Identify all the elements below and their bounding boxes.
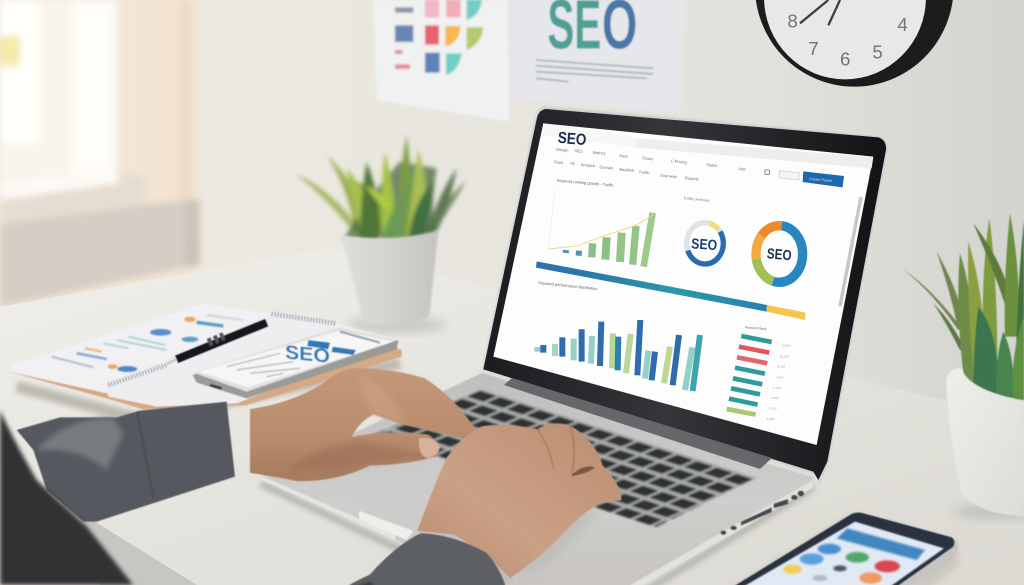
lower chart heading: Keyword performance distribution — [538, 280, 598, 291]
large SEO donut: SEO — [766, 246, 792, 264]
grouped bar chart — [537, 320, 700, 391]
navigation text: C Pricing — [671, 158, 687, 165]
hinge strip — [504, 378, 772, 469]
poster: colour blocks — [373, 0, 509, 122]
shirt sleeve left — [0, 402, 235, 585]
phone screen — [743, 522, 944, 585]
wall clock — [755, 0, 954, 87]
navigation text: Traffic — [639, 169, 650, 175]
clock numerals — [787, 11, 908, 70]
navigation text: Data — [619, 153, 629, 159]
progress band — [536, 261, 806, 320]
smartphone bottom right — [727, 513, 959, 585]
notebook cover — [8, 327, 402, 409]
ranking values — [767, 344, 791, 421]
ranking list heading: Keyword Rank — [745, 325, 767, 331]
laptop lid — [482, 106, 889, 486]
growth bar chart — [548, 188, 653, 267]
clock numerals: 4 — [897, 14, 908, 35]
laptop — [260, 106, 889, 585]
ranking values: 7,540 — [775, 376, 783, 380]
potted plant: right — [903, 213, 1024, 520]
shirt sleeve right — [325, 533, 510, 585]
growth chart heading: Keyword ranking growth - Traffic — [557, 178, 614, 188]
desk surface — [0, 248, 1024, 585]
navigation text: Overview — [660, 173, 677, 179]
phone body — [733, 513, 958, 585]
hands typing — [250, 368, 622, 585]
ranking values: 6,120 — [773, 386, 781, 390]
poster: SEO — [512, 0, 685, 113]
navigation text: Metrics — [593, 150, 606, 156]
navigation text: Backlink — [619, 167, 634, 173]
small SEO donut: SEO — [691, 236, 718, 254]
navigation text — [554, 147, 746, 182]
hand shadow on laptop — [417, 505, 599, 582]
right hand — [417, 423, 622, 578]
notebook spiral — [108, 314, 335, 385]
keyboard — [373, 389, 757, 527]
phone: SEO text: SEO — [285, 341, 330, 368]
left hand — [250, 368, 475, 481]
navigation text: Domain — [599, 164, 613, 171]
base left edge — [260, 476, 395, 540]
navigation text: Status — [706, 162, 718, 168]
clock numerals: 6 — [840, 49, 850, 70]
phone icons — [783, 528, 925, 584]
plant pot — [946, 368, 1024, 517]
screen: Create Report — [809, 177, 832, 183]
navigation text: All — [570, 161, 575, 166]
wall posters — [373, 0, 685, 122]
scrollbar — [838, 197, 863, 307]
notebook drawings — [52, 315, 243, 372]
ranking values: 12,450 — [782, 344, 791, 348]
screen — [493, 123, 873, 445]
window with frame and sill — [0, 0, 200, 307]
navigation text: Scans — [642, 155, 653, 161]
clock numerals: 7 — [808, 38, 819, 59]
horizontal ranking bars — [727, 336, 772, 415]
ranking values: 10,235 — [780, 354, 789, 358]
ranking values: 4,210 — [769, 407, 777, 411]
plant leaves — [295, 135, 467, 240]
notebook right page — [107, 314, 398, 407]
plant leaves — [903, 213, 1024, 400]
large SEO donut — [756, 226, 803, 282]
potted plant: centre — [295, 135, 467, 333]
smartphone on notebook — [193, 327, 398, 398]
SEO logo: SEO — [557, 130, 587, 149]
navigation text: SEO — [574, 148, 583, 154]
ranking values: 3,180 — [767, 417, 774, 421]
navigation text: Analyze — [581, 162, 596, 168]
donut heading: Traffic Overview — [683, 196, 710, 203]
browser tab bar — [635, 138, 873, 168]
ranking values: 8,320 — [778, 364, 785, 368]
navigation text: Design — [556, 147, 569, 153]
ranking values: 5,430 — [771, 396, 779, 400]
notebook left page — [12, 303, 272, 393]
trackpad — [348, 464, 599, 580]
toolbar buttons — [779, 171, 799, 180]
clock numerals: 5 — [872, 41, 883, 62]
pen — [167, 323, 267, 364]
person foreground silhouette — [0, 410, 133, 585]
navigation text: Add — [738, 166, 746, 172]
plant pot — [342, 231, 438, 325]
base right edge — [592, 480, 813, 585]
ports — [720, 491, 804, 535]
laptop base — [260, 373, 814, 585]
clock numerals: 8 — [787, 11, 798, 32]
small SEO donut — [687, 223, 723, 264]
navigation text: Rank — [554, 159, 564, 165]
notebook with charts and pen — [8, 303, 402, 420]
navigation text: Reports — [685, 175, 699, 182]
